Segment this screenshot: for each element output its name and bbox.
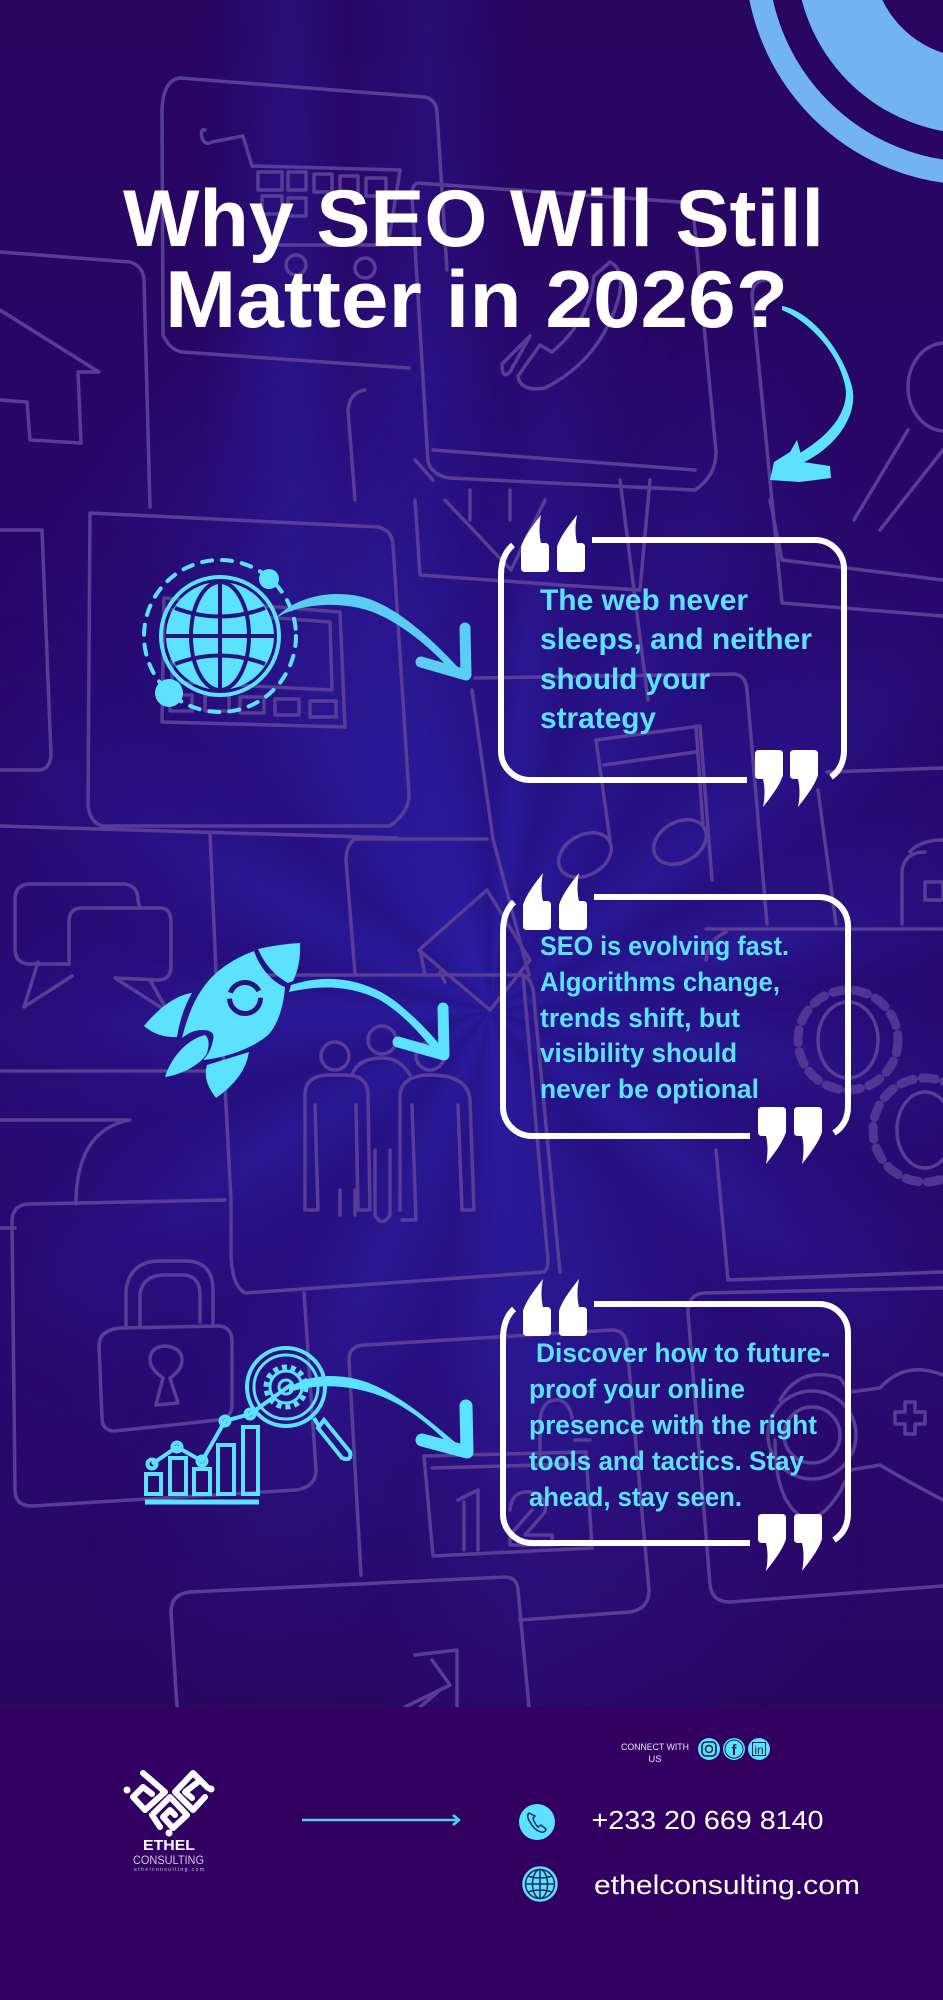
quote text: should your xyxy=(540,663,710,696)
center down arrow tile xyxy=(348,390,650,700)
icon: small globe xyxy=(523,1867,557,1901)
quote text: ahead, stay seen. xyxy=(529,1482,742,1512)
rocket body xyxy=(182,951,285,1060)
rocket fin upper xyxy=(144,993,192,1037)
row lines xyxy=(0,1071,943,1280)
lock tile xyxy=(12,1200,316,1506)
icon: rocket xyxy=(144,943,300,1098)
quote text: presence with the right xyxy=(529,1410,817,1440)
title xyxy=(123,174,824,345)
bottom arrow tile xyxy=(171,1577,529,1707)
title: Matter in 2026? xyxy=(165,255,788,345)
magnifier tile xyxy=(752,280,943,616)
logo xyxy=(124,1773,214,1873)
mortarboard tile xyxy=(210,833,560,1272)
connect with us label: US xyxy=(648,1754,662,1765)
panel: third quote xyxy=(503,1279,848,1571)
arrow: logo to contacts xyxy=(302,1815,459,1825)
quote frame xyxy=(503,1304,848,1543)
closing quote marks xyxy=(755,750,818,807)
decorative concentric rings top right xyxy=(756,0,943,174)
connect with us label xyxy=(621,1742,689,1765)
quote frame xyxy=(501,540,844,780)
quote frame xyxy=(503,897,848,1136)
panel: footer xyxy=(0,1707,943,2000)
title: Why SEO Will Still xyxy=(123,174,824,264)
game controller tile xyxy=(688,1288,943,1602)
music tile xyxy=(472,674,767,975)
icon: phone xyxy=(519,1804,555,1840)
panel: second quote xyxy=(503,873,848,1164)
arrow: brush from title to content xyxy=(770,306,853,482)
chat bubbles xyxy=(15,884,171,1012)
opening quote marks xyxy=(523,873,587,930)
quote text: SEO is evolving fast. xyxy=(540,931,789,961)
icon: globe xyxy=(144,560,296,712)
website: ethelconsulting.com xyxy=(594,1870,860,1900)
opening quote marks xyxy=(523,1279,587,1336)
magnifier with gear xyxy=(247,1348,350,1459)
background top streaks xyxy=(224,0,489,568)
rocket window xyxy=(230,982,260,1014)
large web tile xyxy=(0,513,409,838)
quote text: sleeps, and neither xyxy=(540,623,812,656)
quote text xyxy=(540,931,789,1104)
phone tile xyxy=(412,183,716,490)
icon: facebook: f xyxy=(732,1742,738,1759)
number 12 tile xyxy=(349,1330,649,1620)
background light rays xyxy=(26,392,943,1676)
quote text: strategy xyxy=(540,702,656,735)
rocket nose xyxy=(258,943,300,983)
icon: chart and magnifier xyxy=(145,1348,350,1502)
arrow: chart to third quote xyxy=(289,1376,472,1456)
quote text: tools and tactics. Stay xyxy=(529,1446,804,1476)
quote text xyxy=(529,1338,830,1512)
arrow: rocket to second quote xyxy=(289,979,449,1058)
icon: linkedin xyxy=(748,1738,770,1760)
quote text xyxy=(540,584,812,735)
arrow: globe to first quote xyxy=(276,594,468,678)
closing quote marks xyxy=(758,1514,822,1571)
phone number: +233 20 669 8140 xyxy=(592,1805,824,1835)
quote text: trends shift, but xyxy=(540,1003,740,1033)
logo: ETHEL xyxy=(143,1837,195,1854)
bar chart xyxy=(145,1427,259,1502)
gears xyxy=(798,990,943,1182)
quote text: Algorithms change, xyxy=(540,967,780,997)
quote text: never be optional xyxy=(540,1074,759,1104)
quote text: The web never xyxy=(540,584,748,617)
people tile xyxy=(219,973,548,1293)
quote text: proof your online xyxy=(529,1374,745,1404)
icon: instagram xyxy=(698,1738,720,1760)
trend line xyxy=(148,1384,292,1468)
rocket fin lower xyxy=(206,1052,249,1098)
connect with us label: CONNECT WITH xyxy=(621,1742,689,1753)
icon: facebook xyxy=(723,1738,745,1760)
quote text: Discover how to future- xyxy=(536,1338,830,1368)
icon: linkedin: in xyxy=(754,1743,764,1757)
panel: first quote xyxy=(501,515,844,807)
quote text: visibility should xyxy=(540,1038,737,1068)
right bag tile xyxy=(706,768,943,960)
cart tile xyxy=(162,78,447,368)
logo: CONSULTING xyxy=(133,1853,204,1867)
closing quote marks xyxy=(758,1107,822,1164)
opening quote marks xyxy=(521,515,585,572)
rocket fin middle xyxy=(165,1035,209,1077)
logo: ethelconsulting.com xyxy=(134,1867,204,1873)
upload home tile xyxy=(0,252,150,770)
